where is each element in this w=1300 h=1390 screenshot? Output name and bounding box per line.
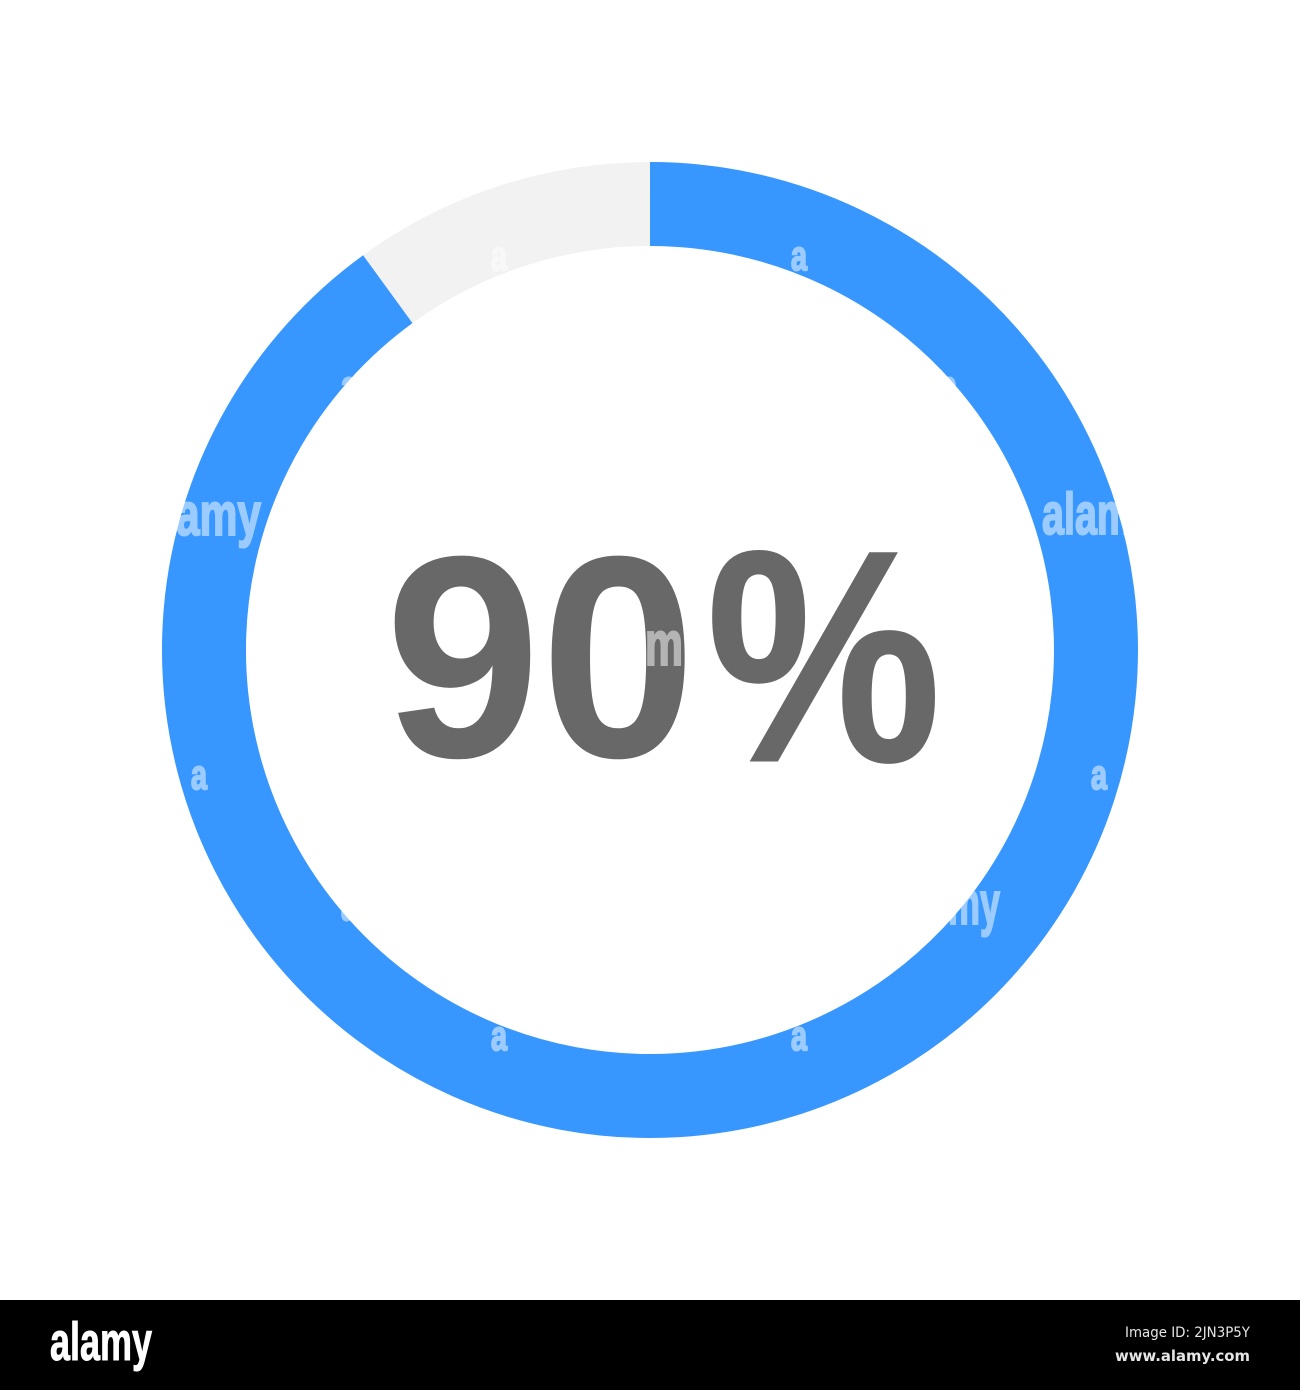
percentage label: % (706, 488, 941, 826)
website: www.alamy.com (1115, 1347, 1250, 1365)
watermarks: a (791, 1012, 807, 1059)
watermarks: a (791, 232, 807, 279)
percentage label (385, 488, 941, 826)
progress ring: filled segment (204, 204, 1096, 1096)
watermarks: a (941, 362, 957, 409)
percentage label: 90 (385, 497, 696, 818)
watermarks: alamy (1042, 482, 1154, 547)
watermarks: my (948, 870, 1000, 937)
watermarks: a (341, 362, 357, 409)
watermarks: a (491, 1012, 507, 1059)
progress ring track: remaining segment (388, 204, 650, 289)
watermarks: amy (176, 481, 261, 548)
watermarks: m (645, 610, 683, 679)
footer bar (0, 1300, 1300, 1390)
watermarks: a (341, 882, 357, 929)
watermarks (176, 232, 1154, 1059)
watermarks: a (191, 751, 207, 798)
footer logo: alamy (50, 1312, 152, 1372)
watermarks: a (491, 232, 507, 279)
watermarks: a (1091, 751, 1107, 798)
image id: Image ID: 2JN3P5Y (1125, 1325, 1250, 1341)
